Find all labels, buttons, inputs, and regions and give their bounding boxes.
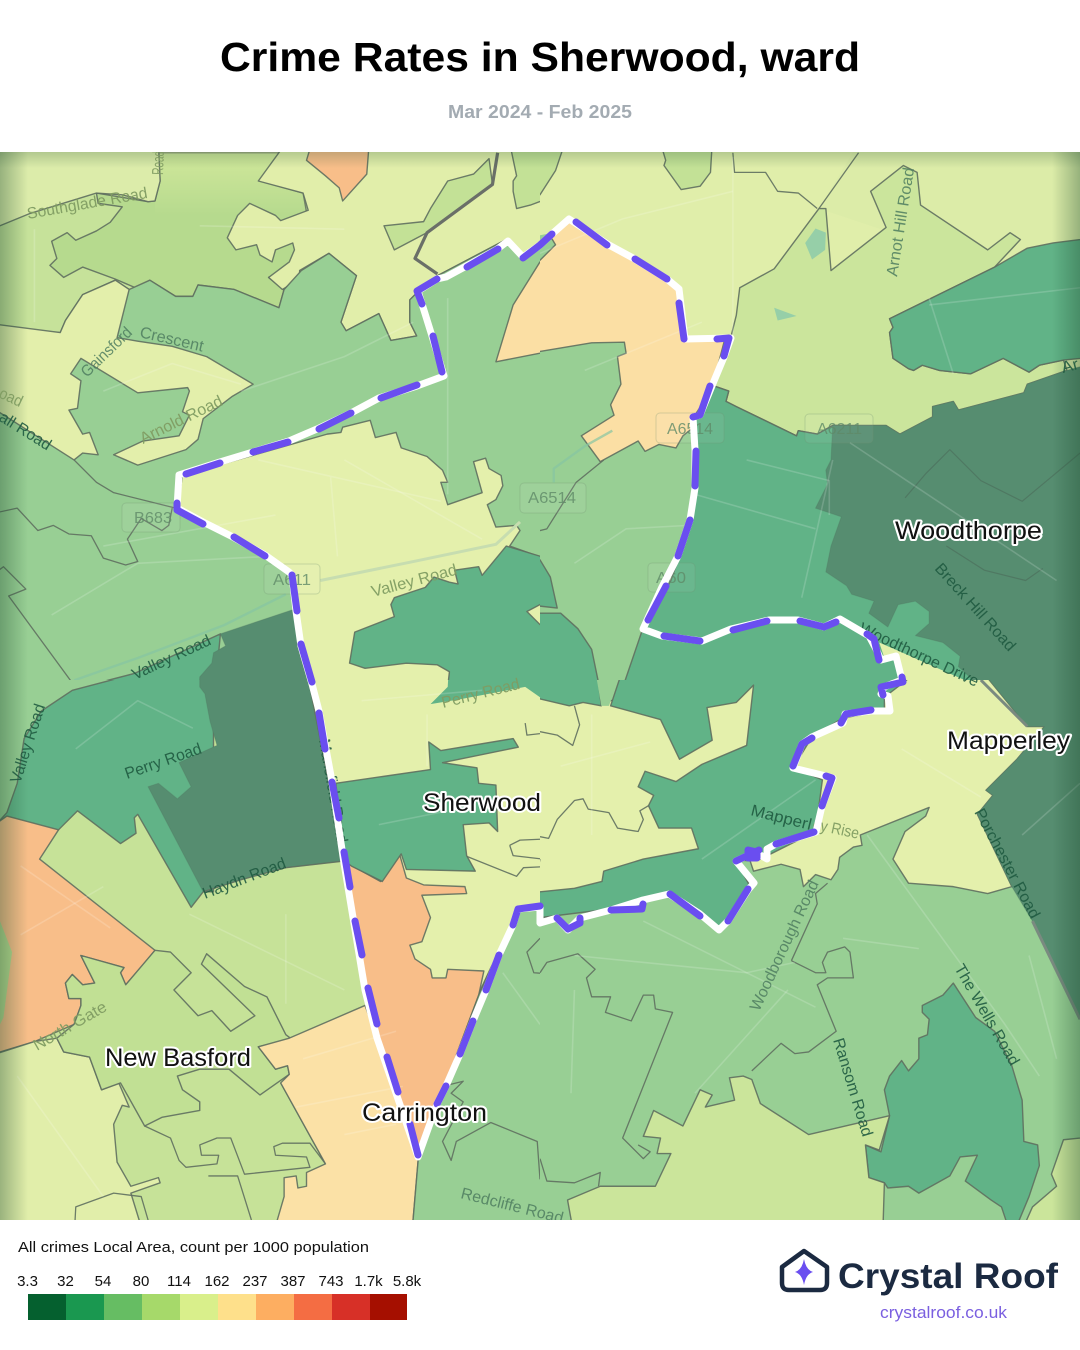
road labels: Southglade Road (26, 185, 149, 223)
area: pale green south (568, 1076, 890, 1238)
legend value labels: 54 (95, 1273, 111, 1290)
area: pale green south-east corner (1019, 1136, 1080, 1238)
road labels: Valley Road (130, 632, 214, 684)
area: green right of park (890, 236, 1080, 374)
logo wordmark: Crystal Roof (838, 1257, 1058, 1296)
map: north-west choropleth areas (0, 152, 540, 680)
ward boundary white outline (177, 219, 902, 1157)
place labels: New Basford (105, 1044, 251, 1072)
road labels: Ar (1060, 356, 1080, 377)
road number shields: A60 (656, 570, 686, 587)
legend value labels: 80 (133, 1273, 149, 1290)
road labels: Arnold Road (137, 393, 226, 448)
area: medium green Sherwood west (336, 739, 518, 881)
area: pale island at top (510, 143, 558, 209)
area: Mapperley yellow top (879, 642, 995, 708)
road labels: Mapperl (749, 802, 813, 834)
road labels (0, 151, 1080, 1227)
area: dark green west (198, 610, 313, 708)
area: orange ward south (346, 854, 484, 1157)
area: north yellow-green (227, 143, 558, 340)
area: far-west green (0, 670, 214, 832)
area: Mapperley dark green (977, 670, 1080, 1038)
area: medium green Sherwood north (350, 546, 558, 708)
legend value labels: 32 (57, 1273, 74, 1290)
area: pale sliver far left (0, 914, 12, 1045)
website link text: crystalroof.co.uk (880, 1304, 1008, 1322)
area: top-right pale (819, 143, 1080, 267)
logo: Crystal Roof (782, 1251, 1058, 1322)
area: medium green east ward (616, 386, 988, 708)
area: west green inside ward (526, 233, 698, 708)
area: top-left pale area (0, 143, 160, 229)
area: medium green Perry Road tip (430, 670, 558, 704)
area: green wedge (595, 670, 623, 706)
legend colour bar (28, 1294, 407, 1320)
road labels: Woodthorpe Drive (856, 620, 981, 691)
road labels: North Gate (30, 999, 110, 1054)
legend value labels: 3.3 (17, 1273, 38, 1290)
road: faint stream lines (74, 594, 286, 680)
area: pale orange north of ward (526, 219, 724, 462)
place labels: Mapperley (947, 727, 1071, 755)
road number shields: A6211 (817, 421, 862, 438)
road number shields (122, 413, 873, 594)
header background (0, 0, 1080, 152)
road labels: Perry Road (440, 676, 522, 712)
road labels: Valley Road (370, 562, 459, 601)
road labels: Perry Road (123, 741, 204, 783)
area: Mapperley Park medium green (530, 670, 907, 930)
area: Mapperley and Sherwood yellow (530, 670, 1045, 918)
area: Wells Road medium green (865, 983, 1039, 1238)
legend value labels: 387 (280, 1273, 306, 1290)
area: orange west (0, 816, 155, 1054)
icon: park ponds (805, 229, 826, 260)
area: pale orange wedge west part (496, 250, 558, 362)
road: B683 boundary line (74, 460, 176, 508)
ward boundary: Sherwood (177, 219, 903, 1157)
road labels: Redcliffe Road (459, 1185, 565, 1227)
road labels: Ransom Road (829, 1036, 875, 1139)
place labels: Sherwood (423, 789, 541, 817)
road: thick railway line (415, 153, 498, 274)
icon: house with star (782, 1251, 827, 1290)
area: lighter fade along top of core (155, 150, 308, 215)
legend value labels: 743 (318, 1273, 344, 1290)
road labels: Road (150, 151, 168, 175)
road labels: Breck Hill Road (931, 560, 1019, 655)
road labels: Arnot Hill Road (884, 166, 918, 278)
legend value labels: 1.7k (354, 1273, 383, 1290)
area: pale orange Carrington west (258, 1005, 418, 1238)
area: green south of ward (412, 906, 558, 1238)
area: medium green west top (530, 670, 601, 706)
road number shields: A6514 (528, 490, 576, 507)
road labels: Crescent (138, 324, 206, 356)
area: medium green west (0, 670, 214, 907)
area: ward south yellow (307, 670, 558, 1157)
area: green band (0, 240, 558, 708)
map: north-east choropleth areas (540, 152, 1080, 680)
place labels: Woodthorpe (895, 517, 1042, 545)
road labels: The Wells Road (951, 962, 1022, 1069)
legend value labels: 237 (242, 1273, 268, 1290)
area: Woodthorpe dark green (816, 362, 1080, 708)
area: south-west yellow (0, 1038, 160, 1238)
road labels: Valley Road (8, 702, 49, 785)
area: pale islands at top (526, 143, 565, 198)
subtitle: date range: Mar 2024 - Feb 2025 (448, 101, 632, 122)
road labels: Porchester Road (970, 806, 1043, 922)
road labels: Haydn Road (200, 855, 289, 903)
area: left pale wedge with Gainsford Crescent (0, 280, 253, 465)
road number shields: B683 (134, 510, 172, 527)
road: Haydn Road boundary (203, 861, 346, 892)
road number shields: A611 (273, 572, 311, 589)
legend value labels: 114 (167, 1273, 191, 1290)
map: south-east choropleth areas (540, 680, 1080, 1220)
area: New Basford outlines (57, 950, 293, 1126)
area: medium west pieces (526, 556, 557, 608)
place labels: Carrington (362, 1099, 487, 1127)
area: ward central yellow (177, 420, 558, 708)
map: south-west choropleth areas (0, 680, 540, 1220)
road labels: Gainsford (78, 324, 136, 381)
area: mid green north-west core (50, 153, 307, 308)
area: small orange area (307, 143, 369, 201)
legend: crime rate scale (17, 1239, 422, 1320)
place labels (105, 517, 1071, 1127)
area: dark green Haydn (148, 670, 346, 892)
area: Arnot Hill park (714, 165, 1067, 436)
footer background (0, 1220, 1080, 1350)
map edge shading (0, 152, 1080, 1220)
legend value labels (17, 1273, 422, 1290)
ward boundary purple dashes (177, 222, 903, 1155)
legend value labels: 162 (204, 1273, 230, 1290)
road number shields: A6514 (667, 421, 713, 438)
area: medium green west (71, 634, 220, 708)
road labels: Woodborough Road (747, 878, 823, 1014)
legend value labels: 5.8k (393, 1273, 422, 1290)
road labels: Mansfield Road (315, 738, 350, 844)
legend title: All crimes Local Area, count per 1000 population (18, 1239, 369, 1256)
road labels: ey Rise (811, 816, 861, 843)
title: Crime Rates in Sherwood, ward (220, 34, 860, 80)
area: pale wedge by railway (384, 159, 492, 250)
